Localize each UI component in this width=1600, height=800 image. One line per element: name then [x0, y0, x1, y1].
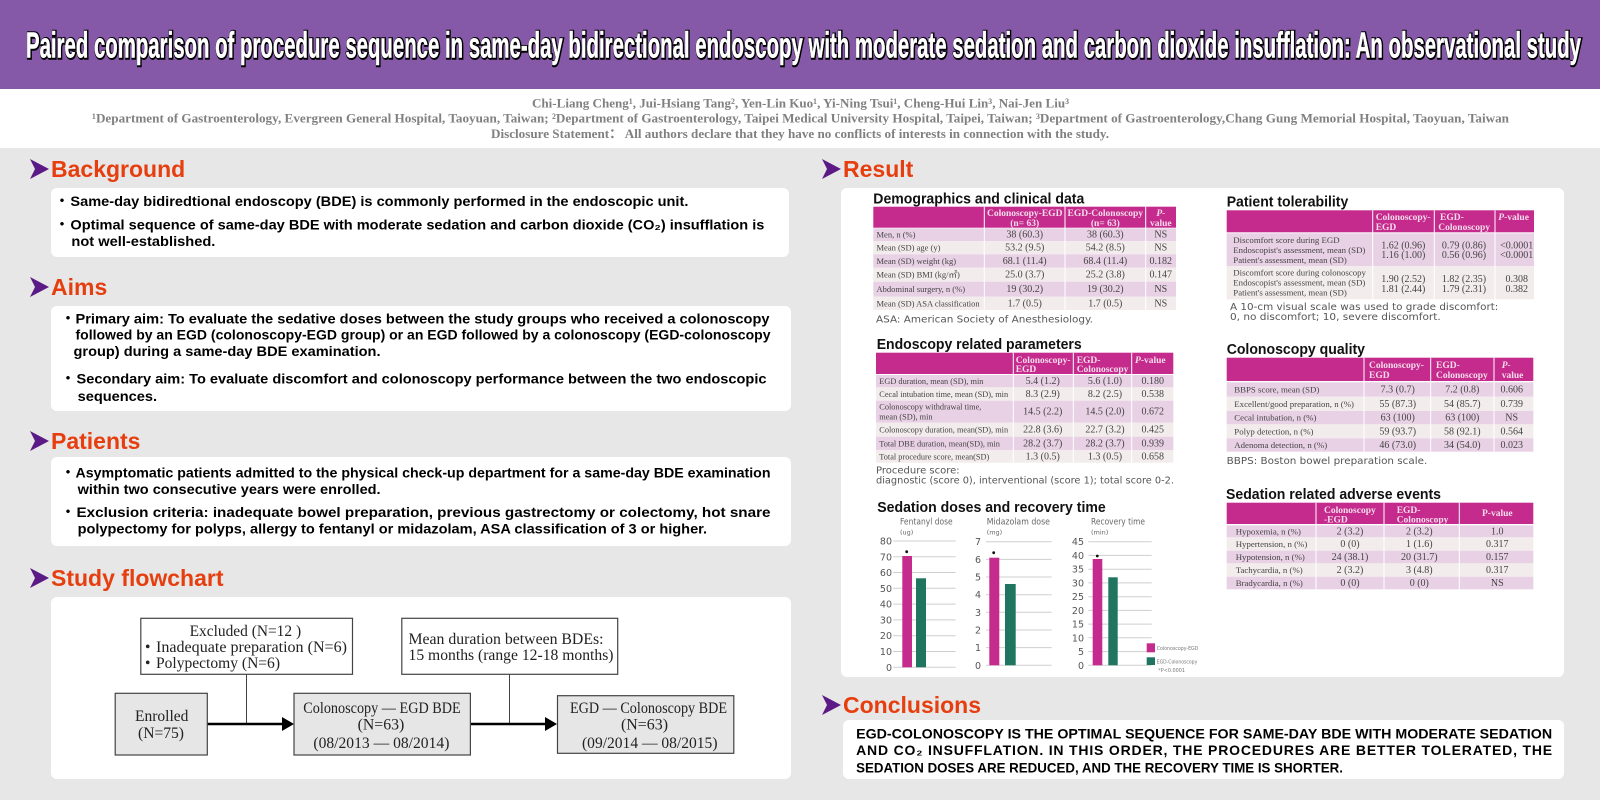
table: colonoscopy quality: 0.023 — [1500, 440, 1523, 451]
table: sedation related adverse events: 0 (0) — [1410, 578, 1429, 589]
table: colonoscopy quality: 46 (73.0) — [1379, 440, 1416, 451]
table: endoscopy related parameters: Colonoscopy- — [1016, 356, 1071, 366]
box: excluded — [141, 618, 352, 674]
heading: background: Background — [51, 156, 185, 182]
table: demographics and clinical data: Mean (SD) weight (kg) — [876, 256, 956, 266]
chart legend: Colonoscopy-EGD — [1157, 646, 1198, 652]
table: patient tolerability: Patient's assessment, mean (SD) — [1233, 287, 1347, 297]
table: colonoscopy quality: 63 (100) — [1381, 413, 1415, 424]
table: patient tolerability: Colonoscopy — [1438, 223, 1490, 233]
box: colonoscopy-EGD BDE: (08/2013 — 08/2014) — [313, 735, 449, 752]
chart legend: *P<0.0001 — [1158, 668, 1185, 674]
box: enrolled — [115, 693, 207, 755]
table: sedation related adverse events: Hypoxemia, n (%) — [1236, 526, 1301, 536]
heading: study flowchart: Study flowchart — [51, 565, 224, 591]
table: demographics and clinical data: value — [1150, 219, 1172, 229]
panel: background: Optimal sequence of same-day BDE with moderate sedation and carbon dioxide (CO₂) insufflation is — [70, 216, 765, 232]
arrow: enrolled to colonoscopy-EGD — [207, 717, 294, 731]
box: colonoscopy-EGD BDE: Colonoscopy — EGD BDE — [303, 700, 461, 717]
icon: section arrow aims — [30, 277, 49, 297]
box: excluded: Inadequate preparation (N=6) — [156, 639, 347, 656]
chart legend — [1147, 643, 1198, 674]
panel: aims — [30, 274, 791, 411]
table: endoscopy related parameters — [876, 337, 1174, 486]
table: endoscopy related parameters: EGD- — [1077, 356, 1100, 366]
table: colonoscopy quality: Cecal intubation, n (%) — [1234, 413, 1316, 423]
chart legend: EGD-Colonoscopy — [1157, 660, 1197, 666]
table: sedation related adverse events: Hypotension, n (%) — [1236, 552, 1305, 562]
table: patient tolerability: A 10-cm visual scale was used to grade discomfort: — [1230, 302, 1498, 313]
panel: aims: sequences. — [78, 388, 157, 404]
table: sedation related adverse events: 0.317 — [1486, 565, 1509, 576]
chart: fentanyl dose: 40 — [880, 600, 892, 611]
heading: result: Result — [843, 156, 914, 182]
table: endoscopy related parameters: 8.2 (2.5) — [1088, 389, 1122, 400]
panel: patients: polypectomy for polyps, allergy to fentanyl or midazolam, ASA classification of 3 or higher. — [78, 521, 707, 537]
box: excluded: Excluded (N=12 ) — [190, 623, 301, 640]
table: demographics and clinical data: 68.4 (11.4) — [1083, 256, 1127, 267]
table: colonoscopy quality: 34 (54.0) — [1444, 440, 1481, 451]
table: demographics and clinical data: Mean (SD) age (y) — [876, 243, 941, 253]
table: sedation related adverse events: P-value — [1482, 509, 1513, 519]
icon: section arrow result — [822, 159, 841, 179]
icon: section arrow patients — [30, 431, 49, 451]
panel: patients: Asymptomatic patients admitted to the physical check-up department for a same-day BDE examination — [76, 464, 770, 480]
table: endoscopy related parameters: EGD duration, mean (SD), min — [879, 377, 984, 386]
table: colonoscopy quality: Excellent/good preparation, n (%) — [1234, 399, 1354, 409]
authors and affiliations: Disclosure Statement： All authors declare that they have no conflicts of interests in connection with the study. — [491, 126, 1109, 141]
table: endoscopy related parameters: Colonoscopy duration, mean(SD), min — [879, 426, 1009, 435]
table: sedation related adverse events: 24 (38.1) — [1332, 552, 1368, 563]
table: sedation related adverse events: 1.0 — [1491, 526, 1504, 537]
table: colonoscopy quality: 63 (100) — [1445, 413, 1479, 424]
table: patient tolerability: 1.79 (2.31) — [1442, 284, 1486, 295]
table: endoscopy related parameters: 0.658 — [1141, 451, 1164, 462]
chart: recovery time: 5 — [1078, 647, 1084, 658]
chart: fentanyl dose: (ug) — [900, 528, 913, 536]
table: demographics and clinical data: Mean (SD) ASA classification — [876, 298, 980, 308]
table: colonoscopy quality: Colonoscopy- — [1369, 361, 1424, 371]
table: demographics and clinical data — [873, 191, 1176, 325]
table: patient tolerability — [1227, 195, 1534, 323]
table: endoscopy related parameters: 0.672 — [1141, 407, 1164, 418]
chart: midazolam dose: 0 — [975, 661, 981, 672]
table: colonoscopy quality: 59 (93.7) — [1379, 426, 1416, 437]
table: endoscopy related parameters: mean (SD), min — [879, 413, 933, 422]
table: endoscopy related parameters: 28.2 (3.7) — [1023, 438, 1062, 449]
table: demographics and clinical data: ASA: American Society of Anesthesiology. — [876, 314, 1093, 325]
table: endoscopy related parameters: 22.8 (3.6) — [1023, 425, 1062, 436]
chart: recovery time: 15 — [1072, 620, 1084, 631]
panel: background: Same-day bidiredtional endoscopy (BDE) is commonly performed in the endoscopic unit. — [70, 193, 688, 209]
panel: aims: Primary aim: To evaluate the sedative doses between the study groups who received a colonoscopy — [76, 310, 770, 326]
chart: midazolam dose: 2 — [975, 626, 981, 636]
chart: midazolam dose: 5 — [975, 572, 981, 584]
chart: fentanyl dose: 50 — [880, 584, 892, 595]
chart: fentanyl dose: 60 — [880, 568, 892, 579]
table: demographics and clinical data: NS — [1154, 243, 1167, 254]
box: EGD-colonoscopy BDE: (N=63) — [621, 716, 668, 734]
table: patient tolerability: Colonoscopy- — [1376, 213, 1431, 223]
panel: result — [822, 156, 1564, 677]
icon: section arrow background — [30, 159, 49, 179]
table: demographics and clinical data: 53.2 (9.5) — [1005, 243, 1044, 254]
table: sedation related adverse events: 0 (0) — [1340, 539, 1360, 550]
chart: midazolam dose: (mg) — [987, 528, 1002, 536]
table: patient tolerability: P-value — [1498, 213, 1529, 223]
chart: fentanyl dose: 20 — [880, 631, 892, 642]
panel: study flowchart — [30, 565, 791, 779]
panel: aims: ・ — [61, 369, 75, 389]
panel: background: ・ — [55, 191, 69, 211]
table: endoscopy related parameters: 0.180 — [1141, 376, 1164, 387]
chart: midazolam dose: 7 — [975, 537, 981, 548]
table: demographics and clinical data: Mean (SD) BMI (kg/㎡) — [876, 270, 960, 280]
connector lines — [246, 674, 510, 724]
chart: midazolam dose: 4 — [975, 590, 981, 601]
table: demographics and clinical data: 25.0 (3.7) — [1005, 270, 1044, 281]
heading: patients: Patients — [51, 428, 140, 454]
table: demographics and clinical data: 68.1 (11.4) — [1003, 256, 1047, 267]
table: colonoscopy quality: Colonoscopy — [1436, 371, 1488, 381]
table: endoscopy related parameters: Cecal intubation time, mean (SD), min — [879, 390, 1009, 399]
table: patient tolerability: 1.62 (0.96) — [1381, 241, 1425, 252]
panel: patients: Exclusion criteria: inadequate bowel preparation, previous gastrectomy or colectomy, hot snare — [76, 504, 771, 520]
table: demographics and clinical data: Men, n (%) — [876, 230, 916, 240]
chart: fentanyl dose: 70 — [880, 552, 892, 563]
chart: recovery time: 0 — [1078, 661, 1084, 672]
table: colonoscopy quality: Colonoscopy quality — [1227, 342, 1365, 358]
box: mean duration — [402, 618, 618, 674]
table: patient tolerability: 0.79 (0.86) — [1442, 241, 1486, 252]
panel: background: ・ — [55, 214, 69, 234]
table: patient tolerability: Patient's assessment, mean (SD) — [1233, 255, 1347, 265]
table: endoscopy related parameters: Total procedure score, mean(SD) — [879, 452, 990, 461]
table: patient tolerability: Discomfort score during EGD — [1233, 235, 1340, 245]
chart: recovery time: (min) — [1091, 528, 1108, 536]
table: sedation related adverse events: Tachycardia, n (%) — [1236, 565, 1303, 575]
table: patient tolerability: 0, no discomfort; 10, severe discomfort. — [1230, 312, 1441, 323]
table: sedation related adverse events: 3 (4.8) — [1406, 565, 1433, 576]
table: sedation related adverse events: 2 (3.2) — [1337, 565, 1363, 576]
panel: patients: within two consecutive years were enrolled. — [77, 481, 381, 497]
icon: section arrow conclusions — [822, 695, 841, 715]
table: sedation related adverse events: Bradycardia, n (%) — [1236, 578, 1303, 588]
table: colonoscopy quality: 55 (87.3) — [1379, 399, 1416, 410]
table: endoscopy related parameters: EGD — [1016, 365, 1036, 375]
table: sedation related adverse events: Colonoscopy — [1397, 516, 1449, 526]
table: patient tolerability: EGD- — [1440, 213, 1464, 223]
table: sedation related adverse events: Hypertension, n (%) — [1236, 539, 1307, 549]
chart: fentanyl dose: Fentanyl dose — [900, 518, 953, 528]
chart: midazolam dose: 6 — [975, 555, 981, 566]
table: demographics and clinical data: 1.7 (0.5) — [1088, 298, 1122, 309]
chart: fentanyl dose: 80 — [880, 536, 892, 548]
panel: patients: ・ — [61, 462, 75, 482]
table: demographics and clinical data: NS — [1154, 284, 1167, 295]
panel: conclusions: SEDATION DOSES ARE REDUCED, AND THE RECOVERY TIME IS SHORTER. — [856, 759, 1343, 775]
table: sedation related adverse events: 2 (3.2) — [1406, 526, 1433, 537]
authors and affiliations — [0, 89, 1600, 148]
table: colonoscopy quality: EGD- — [1436, 361, 1460, 371]
table: endoscopy related parameters: 14.5 (2.2) — [1023, 407, 1062, 418]
table: endoscopy related parameters: Procedure score: — [876, 465, 960, 476]
box: colonoscopy-EGD BDE: (N=63) — [358, 716, 404, 734]
panel: conclusions: AND CO₂ INSUFFLATION. IN THIS ORDER, THE PROCEDURES ARE BETTER TOLERATED, THE — [856, 742, 1552, 758]
table: demographics and clinical data: (n= 63) — [1091, 218, 1120, 229]
table: endoscopy related parameters: 22.7 (3.2) — [1085, 425, 1125, 436]
chart: recovery time: 10 — [1072, 633, 1084, 644]
table: colonoscopy quality: 54 (85.7) — [1444, 399, 1481, 410]
table: endoscopy related parameters: 1.3 (0.5) — [1088, 451, 1122, 462]
table: demographics and clinical data: 0.147 — [1150, 270, 1172, 281]
table: colonoscopy quality: 7.3 (0.7) — [1381, 384, 1415, 396]
table: endoscopy related parameters: 1.3 (0.5) — [1026, 451, 1060, 462]
table: endoscopy related parameters: 0.538 — [1141, 389, 1164, 400]
heading: conclusions: Conclusions — [843, 692, 981, 718]
table: colonoscopy quality: 0.606 — [1500, 384, 1523, 396]
table: endoscopy related parameters: 0.425 — [1141, 425, 1164, 436]
table: sedation related adverse events: EGD- — [1397, 506, 1420, 516]
table: patient tolerability: 1.90 (2.52) — [1381, 274, 1425, 285]
table: demographics and clinical data: 0.182 — [1150, 256, 1172, 267]
table: endoscopy related parameters: 28.2 (3.7) — [1085, 438, 1125, 449]
chart: recovery time: 40 — [1072, 551, 1084, 562]
table: patient tolerability: Endoscopist's assessment, mean (SD) — [1233, 245, 1365, 255]
panel: aims: Secondary aim: To evaluate discomfort and colonoscopy performance between the two endoscopic — [76, 371, 767, 387]
table: demographics and clinical data: 1.7 (0.5) — [1008, 298, 1042, 309]
table: sedation related adverse events: 0 (0) — [1340, 578, 1360, 589]
table: endoscopy related parameters: 5.6 (1.0) — [1088, 376, 1122, 387]
box: excluded: Polypectomy (N=6) — [156, 655, 280, 672]
table: patient tolerability: Endoscopist's assessment, mean (SD) — [1233, 277, 1365, 287]
panel: aims: ・ — [61, 308, 75, 328]
authors and affiliations: Chi-Liang Cheng¹, Jui-Hsiang Tang², Yen-Lin Kuo¹, Yi-Ning Tsui¹, Cheng-Hui Lin³, Nai-Jen Liu³ — [532, 96, 1069, 110]
table: patient tolerability: Patient tolerability — [1227, 195, 1348, 211]
table: colonoscopy quality — [1227, 342, 1533, 467]
panel: conclusions — [822, 692, 1564, 779]
heading: aims: Aims — [51, 274, 107, 300]
chart: recovery time: 35 — [1072, 565, 1084, 576]
table: endoscopy related parameters: 0.939 — [1141, 438, 1164, 449]
table: colonoscopy quality: P- — [1502, 361, 1511, 371]
table: colonoscopy quality: Adenoma detection, n (%) — [1234, 440, 1327, 450]
table: endoscopy related parameters: Total DBE duration, mean(SD), min — [879, 439, 1001, 448]
table: patient tolerability: <0.0001 — [1500, 241, 1533, 252]
table: patient tolerability: 1.82 (2.35) — [1442, 274, 1486, 285]
table: endoscopy related parameters: 8.3 (2.9) — [1026, 389, 1060, 400]
table: patient tolerability: EGD — [1376, 223, 1396, 233]
chart: midazolam dose: 1 — [975, 643, 981, 654]
panel: background — [30, 156, 789, 257]
table: sedation related adverse events: 0.157 — [1486, 552, 1509, 563]
table: sedation related adverse events: -EGD — [1324, 516, 1348, 526]
table: colonoscopy quality: 0.564 — [1500, 426, 1523, 437]
table: colonoscopy quality: 58 (92.1) — [1444, 426, 1481, 437]
table: demographics and clinical data: (n= 63) — [1010, 218, 1039, 229]
table: demographics and clinical data: 38 (60.3) — [1087, 230, 1124, 241]
icon: section arrow flowchart — [30, 568, 49, 588]
table: demographics and clinical data: NS — [1154, 298, 1167, 309]
table: demographics and clinical data: 19 (30.2) — [1087, 284, 1124, 295]
table: sedation related adverse events: 20 (31.7) — [1401, 552, 1438, 563]
table: demographics and clinical data: 54.2 (8.5) — [1086, 243, 1125, 254]
box: enrolled: (N=75) — [138, 725, 184, 742]
table: demographics and clinical data: 38 (60.3) — [1006, 230, 1043, 241]
panel: aims: group) during a same-day BDE examination. — [74, 343, 380, 359]
table: endoscopy related parameters: P-value — [1135, 356, 1166, 366]
header banner — [0, 0, 1600, 89]
table: patient tolerability: 1.81 (2.44) — [1381, 284, 1425, 295]
table: colonoscopy quality: BBPS: Boston bowel preparation scale. — [1227, 456, 1427, 467]
table: sedation related adverse events: 0.317 — [1486, 539, 1509, 550]
panel: background: not well-established. — [71, 233, 215, 249]
box: excluded: • — [145, 639, 150, 656]
table: demographics and clinical data: NS — [1154, 230, 1167, 241]
table: demographics and clinical data: Demographics and clinical data — [873, 191, 1085, 207]
panel: aims: followed by an EGD (colonoscopy-EGD group) or an EGD followed by a colonoscopy (EGD-colonoscopy — [76, 327, 771, 343]
table: colonoscopy quality: EGD — [1369, 371, 1390, 381]
chart: midazolam dose: 3 — [975, 608, 981, 619]
table: demographics and clinical data: P- — [1156, 209, 1165, 219]
box: mean duration: Mean duration between BDEs: — [408, 631, 604, 648]
chart: fentanyl dose: 0 — [886, 663, 892, 674]
table: sedation related adverse events: 1 (1.6) — [1406, 539, 1433, 550]
panel: patients: ・ — [61, 502, 75, 522]
chart: recovery time: 30 — [1072, 578, 1084, 589]
box: mean duration: 15 months (range 12-18 months) — [408, 647, 614, 664]
panel: conclusions: EGD-COLONOSCOPY IS THE OPTIMAL SEQUENCE FOR SAME-DAY BDE WITH MODERATE SEDATION — [856, 726, 1552, 742]
chart: sedation doses and recovery time — [877, 500, 1198, 674]
chart: fentanyl dose: 30 — [880, 615, 892, 626]
table: demographics and clinical data: Abdominal surgery, n (%) — [876, 284, 965, 294]
authors and affiliations: ¹Department of Gastroenterology, Evergreen General Hospital, Taoyuan, Taiwan; ²Department of Gastroenterology, Taipei Medical University Hospital, Taipei, Taiwan; ³Department of Gastroenterology,Chang Gung Memorial Hospital, Taoyuan, Taiwan — [92, 110, 1510, 126]
table: patient tolerability: 0.308 — [1505, 274, 1528, 285]
table: sedation related adverse events — [1226, 487, 1533, 589]
arrow: colonoscopy-EGD to EGD-colonoscopy — [470, 717, 557, 731]
table: sedation related adverse events: 2 (3.2) — [1337, 526, 1363, 537]
chart: fentanyl dose — [880, 518, 956, 674]
chart: fentanyl dose: 10 — [880, 647, 892, 658]
table: demographics and clinical data: 19 (30.2) — [1006, 284, 1043, 295]
table: patient tolerability: 1.16 (1.00) — [1381, 250, 1425, 261]
chart: recovery time: Recovery time — [1091, 518, 1145, 528]
chart: recovery time: 20 — [1072, 606, 1084, 617]
table: endoscopy related parameters: 5.4 (1.2) — [1026, 376, 1060, 387]
table: patient tolerability: 0.382 — [1505, 284, 1528, 295]
table: patient tolerability: <0.0001 — [1500, 250, 1533, 261]
table: demographics and clinical data: 25.2 (3.8) — [1086, 270, 1125, 281]
chart: midazolam dose: Midazolam dose — [987, 518, 1050, 528]
box: excluded: • — [145, 655, 150, 672]
chart: recovery time: 45 — [1072, 537, 1084, 548]
table: patient tolerability: Discomfort score during colonoscopy — [1233, 268, 1367, 278]
table: demographics and clinical data: EGD-Colonoscopy — [1068, 209, 1143, 219]
table: endoscopy related parameters: diagnostic (score 0), interventional (score 1); total score 0-2. — [876, 475, 1174, 486]
box: EGD-colonoscopy BDE — [558, 696, 734, 753]
table: sedation related adverse events: NS — [1491, 578, 1504, 589]
table: endoscopy related parameters: Endoscopy related parameters — [877, 337, 1082, 353]
box: enrolled: Enrolled — [135, 708, 189, 725]
panel: patients — [30, 428, 791, 546]
table: sedation related adverse events: Sedation related adverse events — [1226, 487, 1441, 503]
table: colonoscopy quality: NS — [1505, 413, 1518, 424]
table: colonoscopy quality: 7.2 (0.8) — [1445, 384, 1479, 396]
box: colonoscopy-EGD BDE — [294, 693, 470, 755]
table: sedation related adverse events: Colonoscopy — [1324, 506, 1376, 516]
table: endoscopy related parameters: Colonoscopy — [1077, 365, 1129, 375]
chart: sedation doses and recovery time: Sedation doses and recovery time — [877, 500, 1106, 516]
chart: recovery time: 25 — [1072, 592, 1084, 603]
box: EGD-colonoscopy BDE: EGD — Colonoscopy BDE — [570, 700, 727, 717]
table: endoscopy related parameters: 14.5 (2.0) — [1085, 407, 1125, 418]
box: EGD-colonoscopy BDE: (09/2014 — 08/2015) — [582, 735, 718, 752]
table: colonoscopy quality: value — [1502, 371, 1523, 381]
table: colonoscopy quality: Polyp detection, n (%) — [1234, 426, 1314, 436]
chart: midazolam dose — [975, 518, 1052, 672]
chart: recovery time — [1072, 518, 1152, 672]
table: demographics and clinical data: Colonoscopy-EGD — [987, 209, 1063, 219]
table: colonoscopy quality: BBPS score, mean (SD) — [1234, 384, 1319, 394]
table: colonoscopy quality: 0.739 — [1500, 399, 1523, 410]
table: endoscopy related parameters: Colonoscopy withdrawal time, — [879, 403, 981, 412]
table: patient tolerability: 0.56 (0.96) — [1442, 250, 1486, 261]
